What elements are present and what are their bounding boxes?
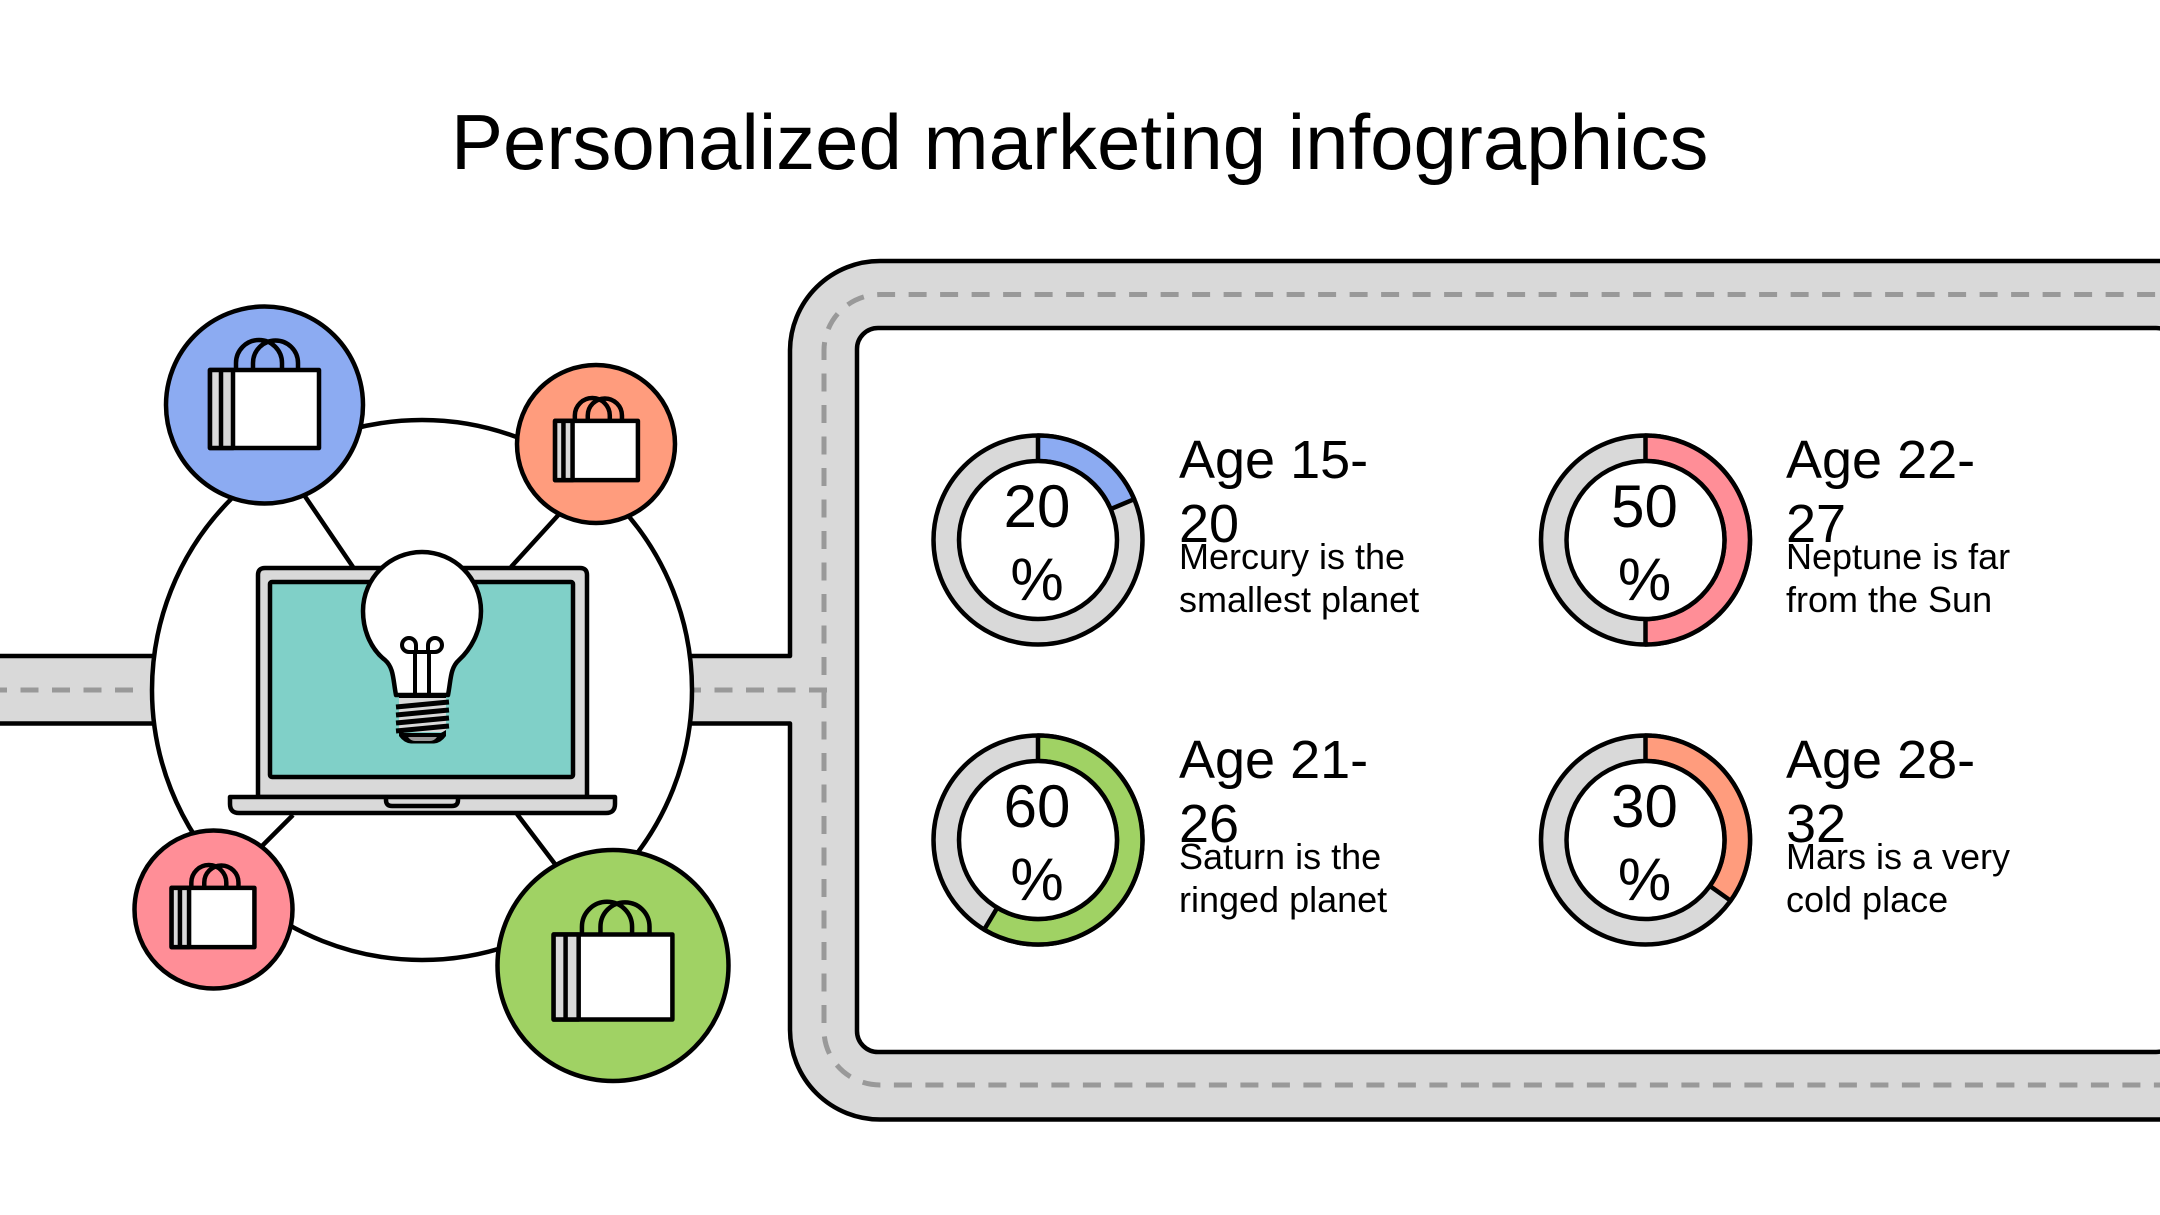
stat: age 21-26 xyxy=(934,730,1387,944)
label: Age 22- xyxy=(1786,430,1975,490)
icon: light bulb xyxy=(363,552,481,744)
node: green shopping bag xyxy=(498,850,728,1081)
donut chart 20 percent: 20 xyxy=(1004,473,1070,540)
stat: age 28-32 xyxy=(1541,730,2010,944)
panel: inner content panel xyxy=(857,328,2160,1052)
donut chart 30 percent: 30 xyxy=(1611,773,1678,840)
donut chart 60 percent: % xyxy=(1010,846,1064,913)
stat: age 15-20 xyxy=(934,430,1419,644)
label: Age 28- xyxy=(1786,730,1975,790)
donut chart 50 percent xyxy=(1541,436,1750,644)
road frame xyxy=(0,261,2160,1120)
stat: age 15-20: Mercury is the xyxy=(1179,536,1405,577)
panel: stats xyxy=(934,430,2010,944)
stat: age 21-26: ringed planet xyxy=(1179,879,1387,920)
stat: age 21-26: Saturn is the xyxy=(1179,836,1381,877)
stat: age 22-27: 27 xyxy=(1786,494,1846,554)
donut chart 50 percent: 50 xyxy=(1611,473,1678,540)
hub network xyxy=(134,306,728,1081)
node: pink shopping bag xyxy=(134,830,292,988)
donut chart 60 percent xyxy=(934,736,1142,944)
donut chart 20 percent: % xyxy=(1010,546,1064,613)
donut chart 30 percent xyxy=(1541,736,1750,944)
spokes xyxy=(258,489,562,868)
node: blue shopping bag xyxy=(166,306,363,504)
stat: age 28-32: 32 xyxy=(1786,794,1846,854)
stat: age 28-32: cold place xyxy=(1786,879,1948,920)
hub circle xyxy=(152,420,692,960)
donut chart 50 percent: % xyxy=(1618,546,1671,613)
label: Age 21- xyxy=(1179,730,1368,790)
stat: age 15-20: 20 xyxy=(1179,494,1239,554)
node: orange shopping bag xyxy=(517,365,675,523)
stat: age 22-27 xyxy=(1541,430,2010,644)
donut chart 30 percent: % xyxy=(1618,846,1671,913)
stat: age 22-27: from the Sun xyxy=(1786,579,1992,620)
donut chart 20 percent xyxy=(934,436,1142,644)
donut chart 60 percent: 60 xyxy=(1004,773,1070,840)
icon: laptop xyxy=(230,568,615,813)
stat: age 28-32: Mars is a very xyxy=(1786,836,2010,877)
label: Age 15- xyxy=(1179,430,1368,490)
stat: age 22-27: Neptune is far xyxy=(1786,536,2010,577)
stat: age 21-26: 26 xyxy=(1179,794,1239,854)
title: Personalized marketing infographics xyxy=(451,98,1708,186)
stat: age 15-20: smallest planet xyxy=(1179,579,1419,620)
